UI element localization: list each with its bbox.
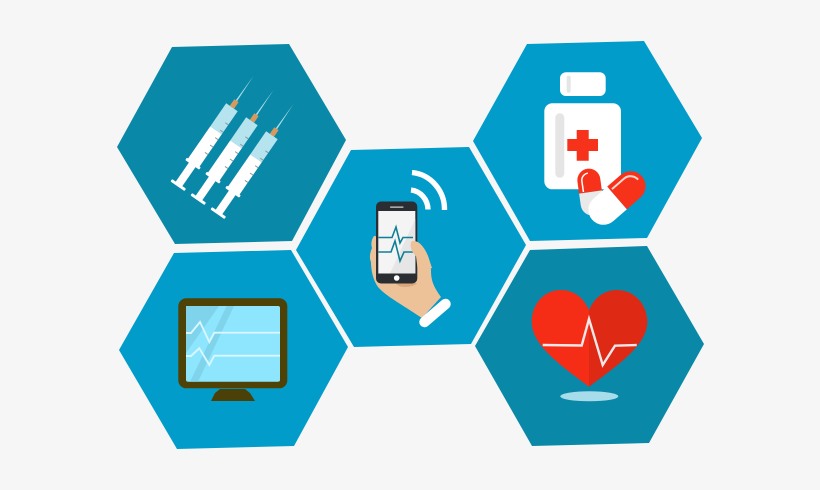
bottle cap: [560, 72, 606, 96]
hexagon: smartphone: [296, 147, 526, 347]
heart left half: [532, 290, 589, 387]
hand back: [370, 236, 441, 318]
glass reflections: [186, 306, 219, 353]
heart right half: [589, 290, 647, 387]
upright capsule: [576, 167, 605, 217]
frame: [178, 298, 287, 388]
hexagon: heart: [475, 246, 704, 446]
icon: heart with pulse: [532, 290, 647, 401]
thumb: [411, 241, 432, 272]
icon: heart monitor screen: [178, 298, 287, 401]
icon: hand holding smartphone: [370, 172, 446, 322]
ecg traces: [378, 227, 413, 261]
pulse line: [543, 319, 637, 365]
bottle body: [544, 103, 621, 189]
phone screen: [378, 211, 415, 274]
icon: three syringes: [170, 71, 300, 219]
ecg traces: [186, 322, 280, 365]
red cross: [567, 130, 598, 161]
floor shadow: [560, 391, 618, 401]
tilted capsule: [582, 165, 652, 231]
phone body: [376, 202, 417, 284]
cuff: [424, 304, 446, 322]
wifi arcs: [411, 172, 445, 210]
hexagon: monitor: [119, 250, 348, 449]
phone shadow: [395, 283, 417, 287]
stand: [211, 389, 255, 401]
icon: medicine bottle and pills: [544, 72, 652, 231]
hexagon: medicine: [473, 41, 702, 241]
hexagon: syringes: [117, 44, 346, 244]
screen: [186, 306, 280, 382]
